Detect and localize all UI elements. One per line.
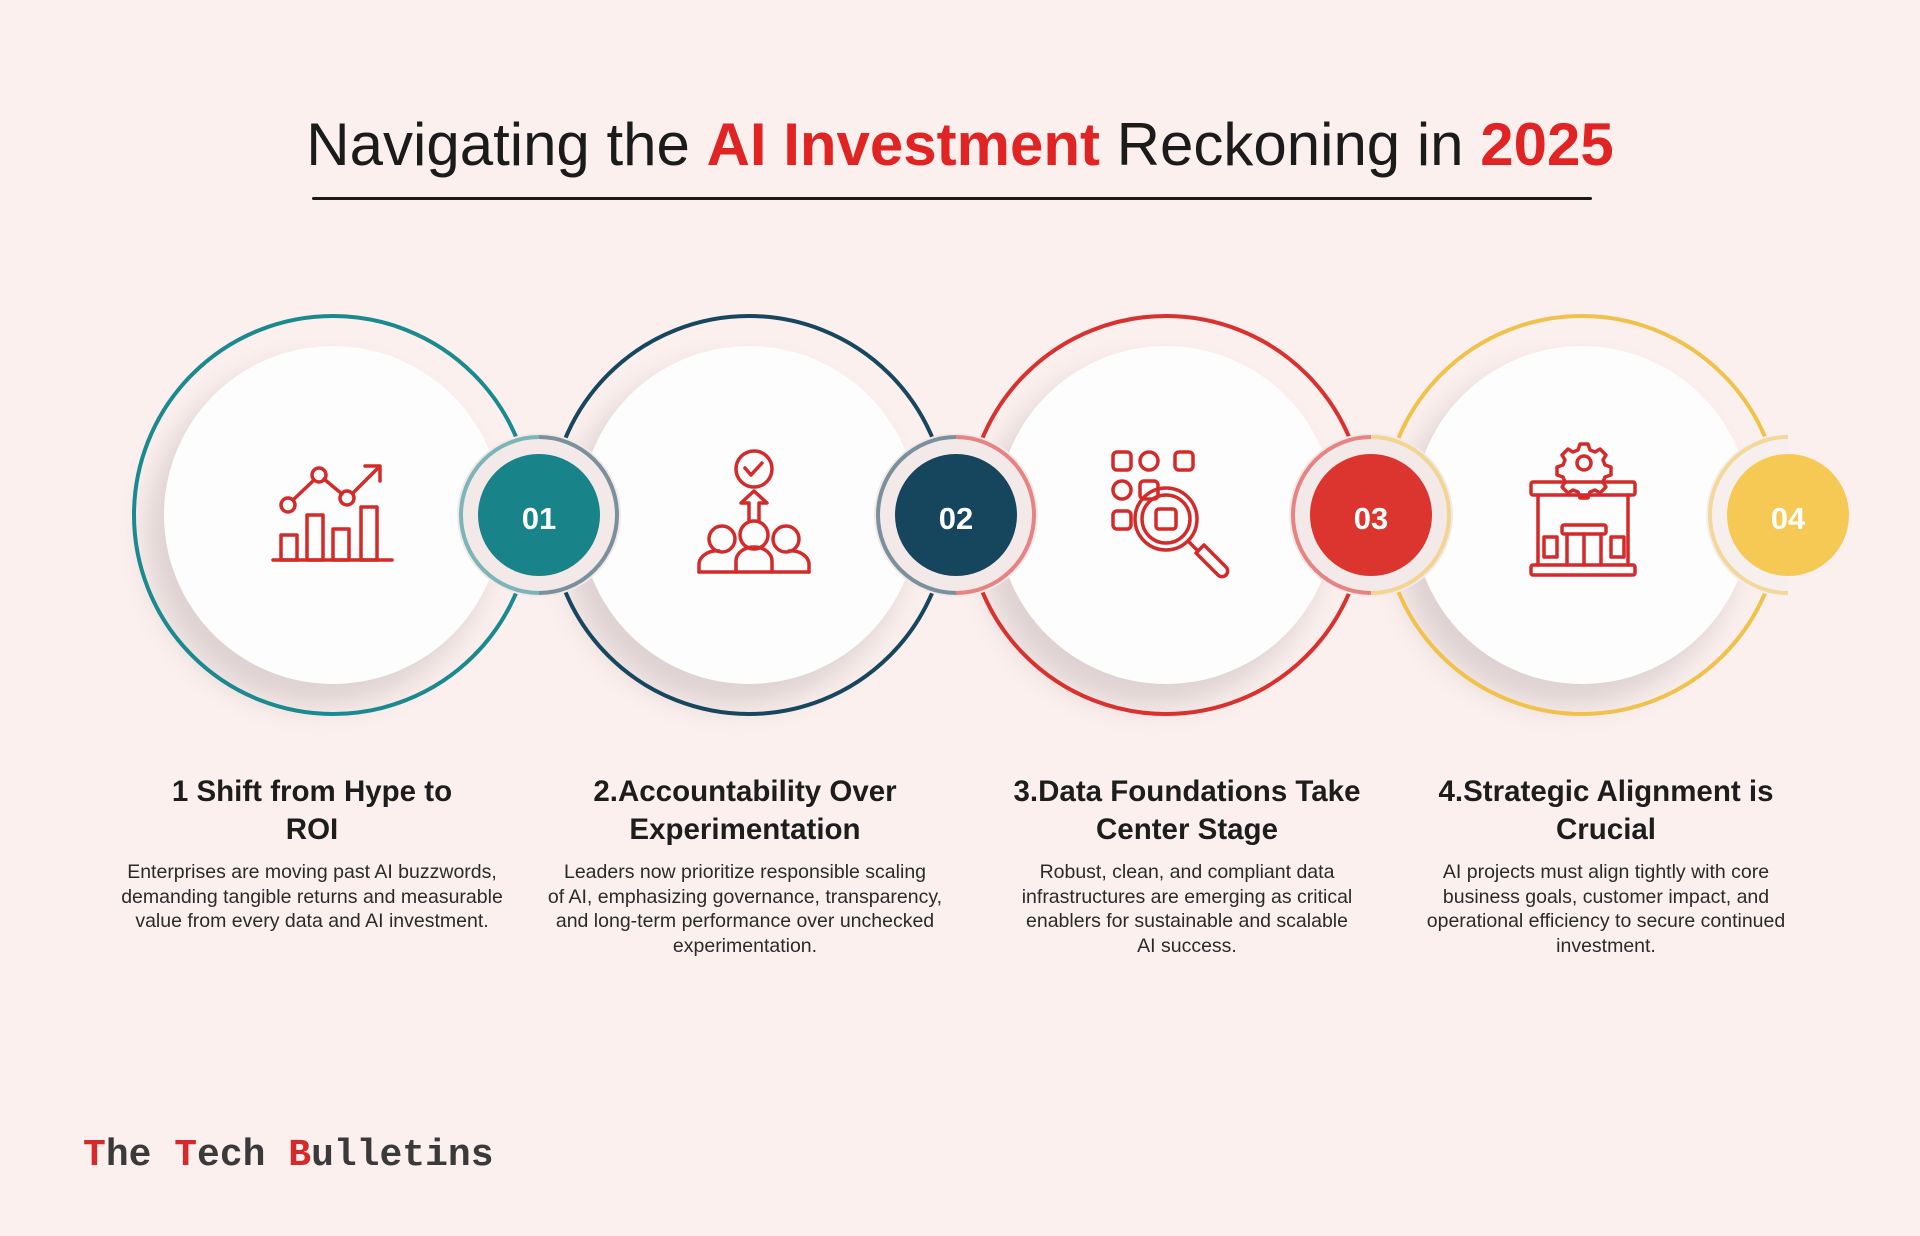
text: step 2 bbox=[548, 775, 942, 956]
text: step 3 bbox=[1014, 775, 1360, 956]
step 2 circle bbox=[550, 316, 948, 714]
text: step 3: AI success. bbox=[1137, 934, 1237, 956]
text: step 1: 1 Shift from Hype to bbox=[172, 775, 452, 808]
step 1 circle bbox=[134, 316, 532, 714]
text: step 1 bbox=[121, 775, 503, 932]
text: step 4: Crucial bbox=[1556, 813, 1656, 846]
icon: team accountability bbox=[699, 451, 809, 572]
badge 02: 02 bbox=[939, 501, 973, 536]
badge 01 bbox=[457, 433, 621, 597]
step 3 circle bbox=[967, 316, 1365, 714]
text: step 1: Enterprises are moving past AI buzzwords, demanding tangible returns and measurable value from every data and AI investment. bbox=[121, 861, 503, 932]
text: step 4: 4.Strategic Alignment is bbox=[1439, 775, 1773, 808]
text: step 3: Center Stage bbox=[1096, 813, 1278, 846]
logo: The Tech Bulletins bbox=[83, 1134, 494, 1177]
text: step 3: Robust, clean, and compliant data infrastructures are emerging as critical enablers for sustainable and scalable bbox=[1022, 861, 1352, 932]
badge 01: 01 bbox=[522, 501, 556, 536]
badge 03: 03 bbox=[1354, 501, 1388, 536]
icon: growth chart bbox=[273, 466, 392, 560]
title: Navigating the AI Investment Reckoning in 2025 bbox=[306, 111, 1614, 178]
text: step 3: 3.Data Foundations Take bbox=[1014, 775, 1360, 808]
text: step 2: of AI, emphasizing governance, transparency, and long-term performance over unchecked experimentation. bbox=[548, 886, 942, 956]
step 4 circle bbox=[1383, 316, 1781, 714]
badge 02 bbox=[874, 433, 1038, 597]
text: step 2: Experimentation bbox=[629, 813, 861, 846]
badge 03 bbox=[1289, 433, 1453, 597]
text: step 2: Leaders now prioritize responsible scaling bbox=[564, 861, 926, 883]
text: step 2: 2.Accountability Over bbox=[593, 775, 897, 808]
text: step 4 bbox=[1427, 775, 1785, 956]
badge 04: 04 bbox=[1771, 501, 1806, 536]
icon: data search bbox=[1113, 452, 1228, 577]
text: step 1: ROI bbox=[286, 813, 338, 846]
badge 04 bbox=[1706, 433, 1849, 597]
text: step 4: AI projects must align tightly with core business goals, customer impact, and operational efficiency to secure continued investment. bbox=[1427, 861, 1785, 956]
icon: strategic building bbox=[1531, 444, 1635, 575]
